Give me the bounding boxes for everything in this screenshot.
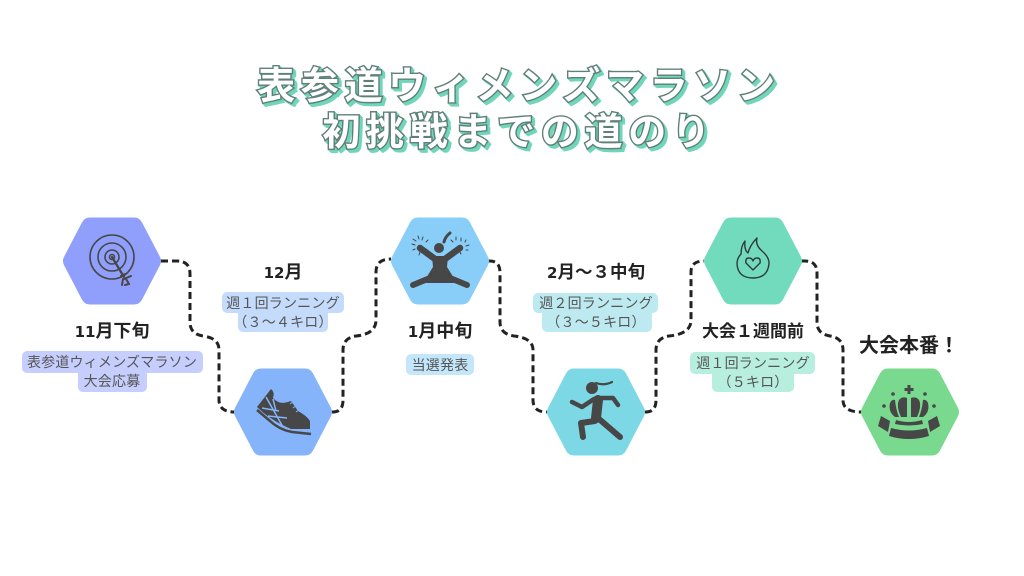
badge: 週2回ランニング（3〜5キロ）: （３～５キロ） (546, 312, 646, 332)
icon: flame with heart (737, 238, 769, 278)
step 4: February to March (533, 259, 658, 446)
heading: 大会1週間前: 大会１週間前 (702, 317, 804, 342)
hexagon: step 1 (72, 226, 152, 296)
step 3: January (400, 226, 480, 375)
step 2: December (222, 258, 344, 446)
hexagon: step 3 (400, 226, 480, 296)
icon: runner (572, 382, 620, 437)
step 1: November (22, 226, 203, 392)
hexagon: step 2 (243, 378, 323, 446)
hexagon: step 6 (870, 378, 950, 446)
step 5: one week before (690, 226, 815, 392)
icon: crown with ribbon (878, 385, 940, 439)
step 6: race day (859, 329, 959, 446)
badge: 表参道ウィメンズマラソン 大会応募: 大会応募 (84, 371, 140, 391)
badge: 週1回ランニング（5キロ）: （５キロ） (718, 372, 788, 392)
badge: 週2回ランニング（3〜5キロ）: 週２回ランニング (539, 293, 653, 313)
heading: 大会本番！: 大会本番！ (859, 329, 959, 358)
badge: 週2回ランニング（3〜5キロ） (533, 293, 658, 332)
badge: 表参道ウィメンズマラソン 大会応募: 表参道ウィメンズマラソン (27, 352, 197, 372)
heading: 12月: 12月 (264, 258, 302, 284)
icon: target with arrow (90, 235, 134, 285)
badge: 週1回ランニング（3〜4キロ） (222, 292, 344, 332)
connector: step 3 to step 4 (488, 261, 547, 412)
title (255, 55, 781, 156)
heading: 11月下旬: 11月下旬 (75, 317, 149, 343)
connector: step 5 to step 6 (801, 261, 861, 412)
title: 表参道ウィメンズマラソン (257, 55, 781, 110)
heading: 1月中旬: 1月中旬 (408, 317, 472, 343)
heading: 2月〜3中旬: 2月～３中旬 (547, 259, 645, 284)
badge: 週1回ランニング（3〜4キロ）: （３～４キロ） (233, 312, 333, 332)
hexagon: step 5 (713, 226, 793, 296)
connector: step 2 to step 3 (332, 259, 391, 412)
connector: step 4 to step 5 (645, 261, 704, 412)
icon: cheering figure (412, 233, 469, 285)
badge: 当選発表: 当選発表 (412, 355, 468, 375)
connector: step 1 to step 2 (161, 261, 235, 412)
badge: 週1回ランニング（5キロ） (690, 352, 815, 392)
title: 初挑戦までの道のり (322, 101, 716, 156)
badge: 表参道ウィメンズマラソン 大会応募 (22, 351, 203, 392)
icon: running shoe (257, 389, 311, 434)
badge: 週1回ランニング（3〜4キロ）: 週１回ランニング (226, 293, 340, 313)
hexagon: step 4 (556, 378, 636, 446)
badge: 週1回ランニング（5キロ）: 週１回ランニング (696, 353, 810, 373)
